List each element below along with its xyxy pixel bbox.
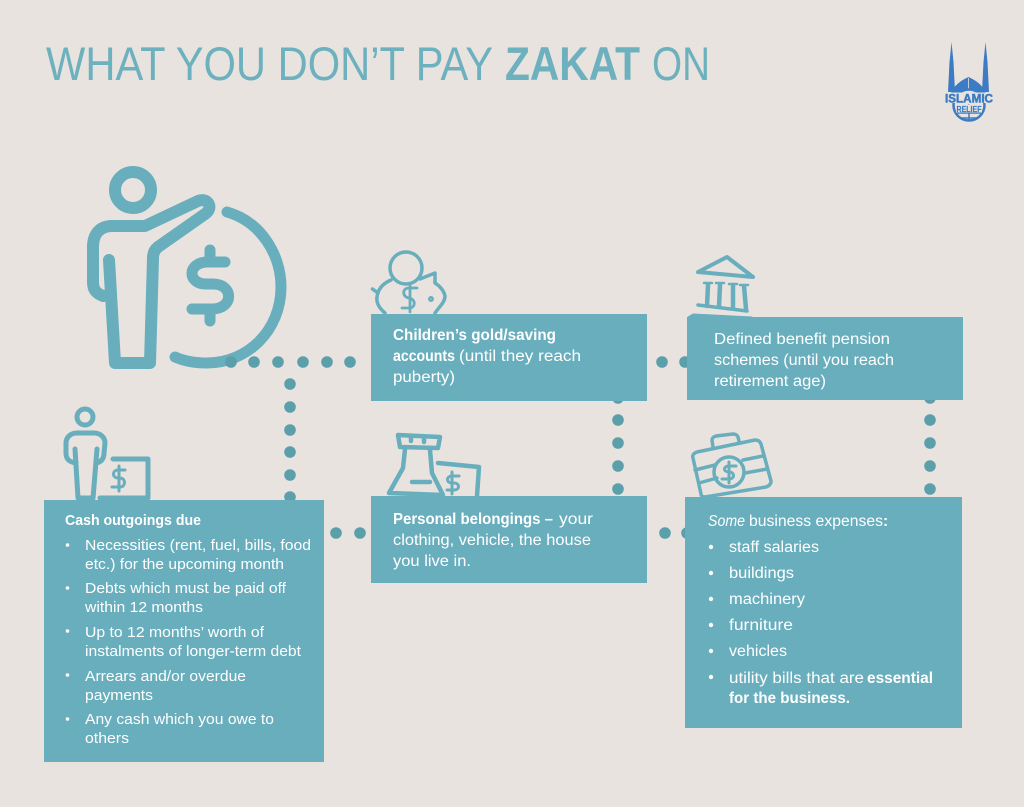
list: expenses: furniture bbox=[729, 617, 793, 634]
list: outgoings: Necessities (rent, fuel, bills, food bbox=[85, 538, 311, 554]
panel: pension schemes bbox=[687, 317, 963, 400]
list: expenses: staff salaries bbox=[729, 539, 819, 556]
panel: children's savings: Children’s gold/saving bbox=[393, 327, 556, 344]
list: expenses: buildings bbox=[729, 565, 794, 582]
title: ZAKAT bbox=[505, 38, 640, 91]
list: outgoings: payments bbox=[85, 688, 153, 704]
panel: business expenses: : bbox=[883, 513, 888, 530]
title: WHAT YOU DON’T PAY bbox=[46, 38, 493, 91]
title: ON bbox=[652, 38, 710, 91]
panel: children's savings bbox=[371, 314, 647, 401]
panel: personal belongings: clothing, vehicle, the house bbox=[393, 532, 591, 549]
list: outgoings: Up to 12 months’ worth of bbox=[85, 625, 265, 641]
logo: Islamic Relief: ISLAMIC bbox=[945, 94, 993, 106]
panel: business expenses bbox=[685, 497, 962, 728]
list: expenses: machinery bbox=[729, 591, 805, 608]
panel: children's savings: puberty) bbox=[393, 369, 455, 386]
list: outgoings bbox=[66, 538, 311, 747]
panel: business expenses: Some bbox=[708, 513, 745, 530]
list: expenses: for the business. bbox=[729, 690, 850, 707]
icon: person with cash box bbox=[66, 409, 148, 498]
list: outgoings: Any cash which you owe to bbox=[85, 712, 274, 728]
list: outgoings: within 12 months bbox=[84, 600, 203, 616]
panel: pension schemes: Defined benefit pension bbox=[714, 331, 890, 348]
list: expenses: essential bbox=[867, 670, 933, 687]
panel: pension schemes: schemes (until you reach bbox=[714, 352, 894, 369]
connector dots bbox=[225, 356, 936, 539]
panel: personal belongings: you live in. bbox=[393, 553, 471, 570]
list: expenses: vehicles bbox=[729, 643, 787, 660]
panel: personal belongings bbox=[371, 496, 647, 583]
list: expenses bbox=[709, 539, 933, 707]
icon: bank building bbox=[688, 257, 753, 317]
icon: briefcase with dollar bbox=[693, 434, 771, 497]
logo: Islamic Relief bbox=[945, 42, 993, 121]
icon: castle tower with cash bbox=[389, 435, 479, 496]
logo: Islamic Relief: RELIEF bbox=[956, 105, 982, 114]
panel: children's savings: (until they reach bbox=[459, 348, 581, 365]
panel: cash outgoings due: Cash outgoings due bbox=[65, 513, 201, 529]
panel: business expenses: business expenses bbox=[749, 513, 883, 530]
list: outgoings: Debts which must be paid off bbox=[85, 581, 287, 597]
list: outgoings: others bbox=[85, 731, 129, 747]
list: expenses: utility bills that are bbox=[729, 670, 864, 687]
panel: pension schemes: retirement age) bbox=[714, 373, 826, 390]
panel: children's savings: accounts bbox=[393, 348, 455, 365]
list: outgoings: instalments of longer-term debt bbox=[85, 644, 301, 660]
list: outgoings: etc.) for the upcoming month bbox=[85, 557, 284, 573]
panel: personal belongings: your bbox=[559, 511, 593, 528]
icon: person pointing at coin bbox=[93, 172, 281, 363]
panel: personal belongings: Personal belongings – bbox=[393, 511, 553, 528]
icon: piggy bank bbox=[372, 252, 445, 313]
list: outgoings: Arrears and/or overdue bbox=[85, 669, 246, 685]
panel: cash outgoings due bbox=[44, 500, 324, 762]
